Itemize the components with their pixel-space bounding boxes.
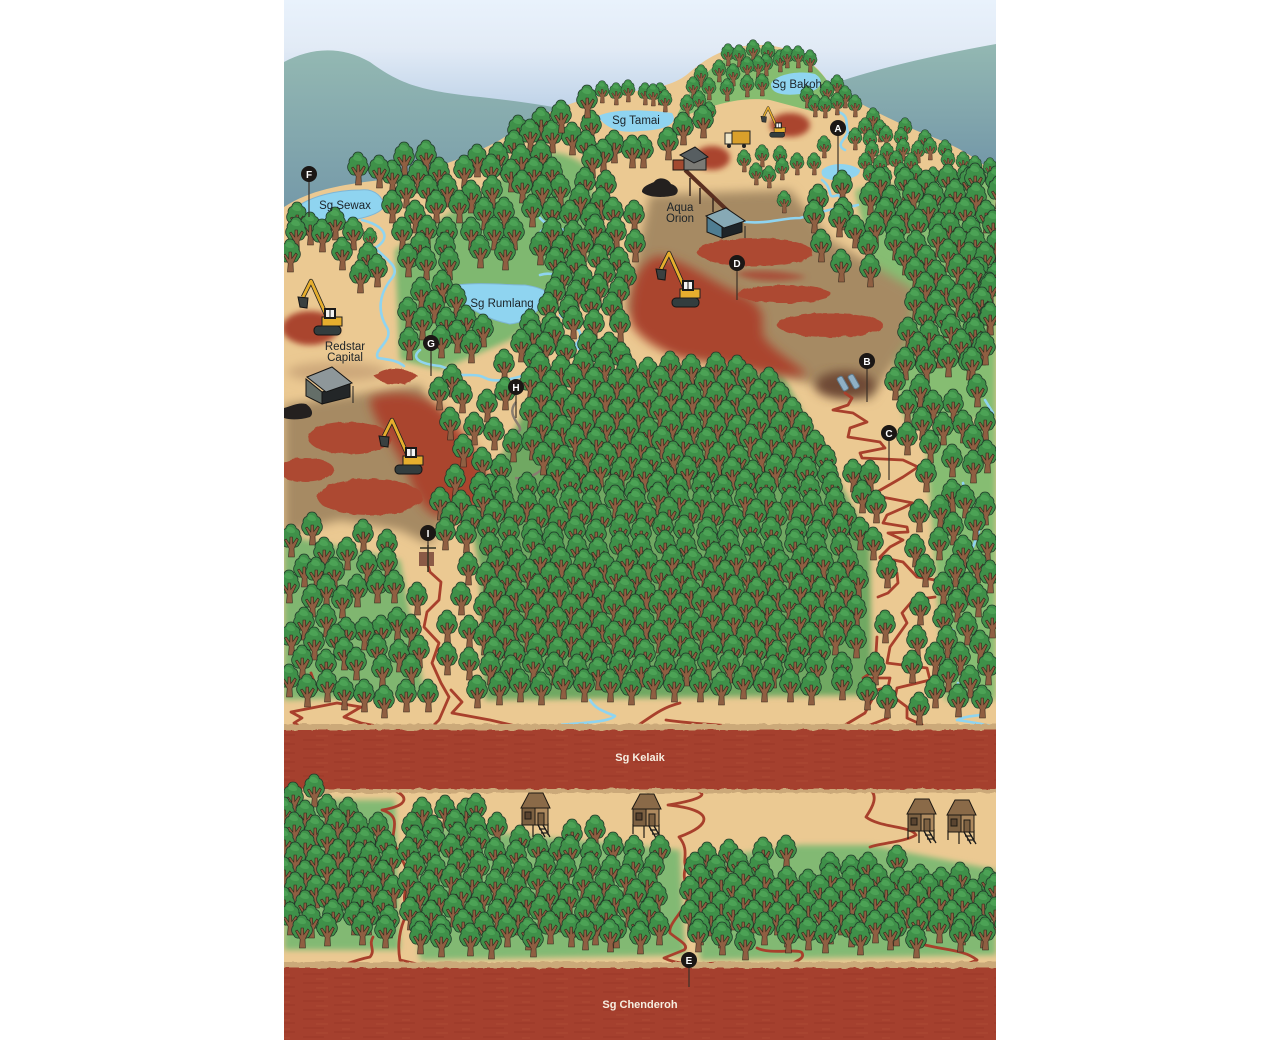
forest: west side trees (280, 152, 389, 293)
forest: upper centre (382, 85, 645, 410)
company label: Aqua Orion: Aqua (667, 202, 693, 214)
pin F (301, 166, 317, 217)
pin C (881, 425, 897, 480)
trees around the mine site (633, 105, 831, 213)
company label: Aqua Orion: Orion (666, 213, 694, 225)
conveyor (685, 170, 729, 212)
map illustration (270, 0, 1036, 1040)
lake and river labels: Sg Sewax (319, 200, 371, 212)
pin D: D (733, 259, 741, 270)
truck (725, 131, 750, 148)
pin C: C (885, 429, 893, 440)
lake and river labels: Sg Tamai (612, 115, 660, 127)
mine building: Redstar Capital (306, 367, 353, 404)
sky (284, 0, 996, 107)
exposed brown earth (284, 190, 915, 545)
pin I: I (427, 529, 430, 540)
green hill and forest floors (284, 48, 996, 960)
pin A (830, 120, 846, 172)
forest: trees in the red zone (429, 364, 523, 507)
lake and river labels: Sg Bakoh (772, 79, 822, 91)
forest: south-west block (279, 512, 438, 718)
forest: central (430, 349, 886, 708)
land base (284, 45, 996, 1040)
village huts (521, 793, 976, 844)
pin G (423, 335, 439, 376)
excavators (298, 108, 785, 474)
pin H: H (512, 383, 520, 394)
pin E: E (686, 956, 693, 967)
pin H (508, 379, 524, 418)
company label: Redstar Capital: Capital (327, 352, 363, 364)
mine building: Aqua Orion lower (706, 208, 745, 238)
forest: hilltop (595, 40, 862, 124)
pin A: A (834, 124, 842, 135)
pin F: F (306, 170, 312, 181)
red sediment zones (278, 113, 883, 518)
forest: upper right slope (803, 107, 996, 726)
mine building: Aqua Orion upper (673, 147, 708, 170)
pin G: G (427, 339, 435, 350)
pin B (859, 353, 875, 402)
forest: south bank east (679, 834, 996, 960)
pipes at B (836, 374, 860, 392)
lake and river labels: Sg Rumlang (470, 298, 534, 310)
background mountains (284, 44, 996, 207)
river: Sg Kelaik (270, 730, 1010, 789)
forest: south bank west (274, 774, 403, 948)
grey creek from H (512, 402, 545, 478)
pin I (420, 525, 436, 552)
pin D (729, 255, 745, 300)
earth banks (270, 724, 1010, 969)
coal piles (284, 178, 678, 419)
lakes and blue streams (293, 72, 995, 727)
red tributary streams (291, 393, 977, 968)
pin B: B (863, 357, 871, 368)
company label: Redstar Capital: Redstar (325, 341, 365, 353)
lake and river labels (319, 79, 822, 1011)
river: Sg Chenderoh (270, 968, 1010, 1040)
lake and river labels: Sg Kelaik (615, 752, 666, 764)
forest: south bank middle (398, 793, 670, 959)
pump gear at I (419, 545, 436, 572)
pin E (681, 952, 697, 987)
lake and river labels: Sg Chenderoh (602, 999, 678, 1011)
